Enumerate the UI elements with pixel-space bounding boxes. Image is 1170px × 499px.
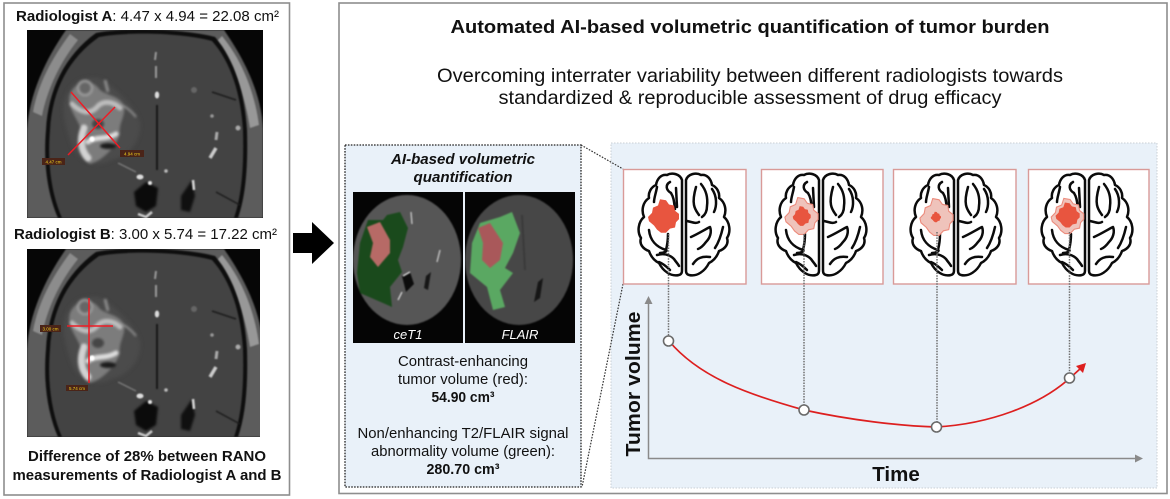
panel heading: AI-based volumetric: [390, 152, 535, 168]
time point connectors: [668, 232, 1070, 422]
MRI scan: radiologist A: [27, 30, 263, 218]
arrow: from manual to automated: [293, 222, 334, 264]
chart: tumor volume over time: [622, 232, 1143, 486]
scan labels: [394, 327, 538, 342]
segmentation: non-enhancing (green): [470, 212, 520, 310]
panel heading: [390, 152, 535, 186]
title: Automated AI-based volumetric quantification of tumor burden: [450, 17, 1050, 37]
contrast-enhancing volume text: [398, 353, 528, 406]
axes: [648, 302, 1136, 458]
measurement label 5.74 cm: 5.74 cm: [69, 386, 85, 391]
measurement label 4.94 cm: [120, 150, 144, 157]
tumor: shrinking core with previous extent: [785, 198, 818, 234]
non-enhancing volume text: abnormality volume (green):: [371, 443, 555, 460]
tumor: solid: [648, 199, 679, 233]
measurement cross B: [67, 298, 113, 383]
segmentation: enhancing (red): [478, 223, 503, 268]
brain card 1: untreated tumor: [624, 170, 746, 284]
measurement label 5.74 cm: [66, 385, 88, 391]
measurement cross A: [68, 92, 120, 155]
non-enhancing volume text: [358, 425, 568, 478]
scan: ceT1: [353, 192, 463, 343]
tumor: smallest core with previous extent: [920, 199, 953, 235]
scan: FLAIR: [465, 192, 575, 343]
zoom connector lines: [581, 145, 623, 487]
x axis label: Time: [872, 463, 920, 486]
MRI scan: radiologist B: [27, 249, 263, 437]
y axis label: Tumor volume: [622, 312, 645, 456]
contrast-enhancing volume text: tumor volume (red):: [398, 371, 528, 388]
measurement label 4.47 cm: 4.47 cm: [45, 160, 62, 164]
tumor volume curve: [669, 341, 1081, 427]
conclusion text: [12, 449, 282, 484]
contrast-enhancing volume text: Contrast-enhancing: [398, 353, 528, 370]
panel: timeline background: [611, 143, 1157, 488]
measurement label 4.94 cm: 4.94 cm: [124, 152, 140, 156]
conclusion text: Difference of 28% between RANO: [28, 449, 266, 465]
measurement label 3.00 cm: [40, 325, 61, 332]
tumor: regrowing core with previous extent: [1051, 198, 1084, 234]
heading: radiologist A measurement: Radiologist A: 4.47 x 4.94 = 22.08 cm²: [16, 8, 279, 25]
conclusion text: measurements of Radiologist A and B: [12, 468, 282, 484]
panel: automated quantification: [339, 3, 1167, 494]
measurement label 3.00 cm: 3.00 cm: [42, 326, 59, 332]
brain card 3: best response: [894, 170, 1016, 284]
subtitle: [437, 65, 1063, 109]
measurement label 4.47 cm: [42, 158, 65, 165]
data points: [664, 336, 1074, 432]
scan labels: ceT1: [394, 327, 422, 342]
brain card 2: partial response: [762, 170, 883, 284]
heading: radiologist B measurement: Radiologist B: 3.00 x 5.74 = 17.22 cm²: [14, 226, 277, 243]
contrast-enhancing volume text: 54.90 cm³: [432, 389, 494, 406]
segmentation: non-enhancing (green): [357, 212, 408, 307]
non-enhancing volume text: Non/enhancing T2/FLAIR signal: [358, 425, 568, 442]
segmentation: enhancing (red): [367, 222, 390, 267]
scan labels: FLAIR: [502, 327, 538, 342]
brain card 4: regrowth: [1028, 170, 1149, 284]
non-enhancing volume text: 280.70 cm³: [426, 461, 500, 478]
panel: radiologist comparison: [4, 3, 290, 495]
subtitle: Overcoming interrater variability between different radiologists towards: [437, 65, 1063, 87]
panel heading: quantification: [414, 170, 513, 186]
panel: AI-based volumetric quantification: [345, 145, 581, 487]
subtitle: standardized & reproducible assessment of drug efficacy: [498, 87, 1002, 109]
